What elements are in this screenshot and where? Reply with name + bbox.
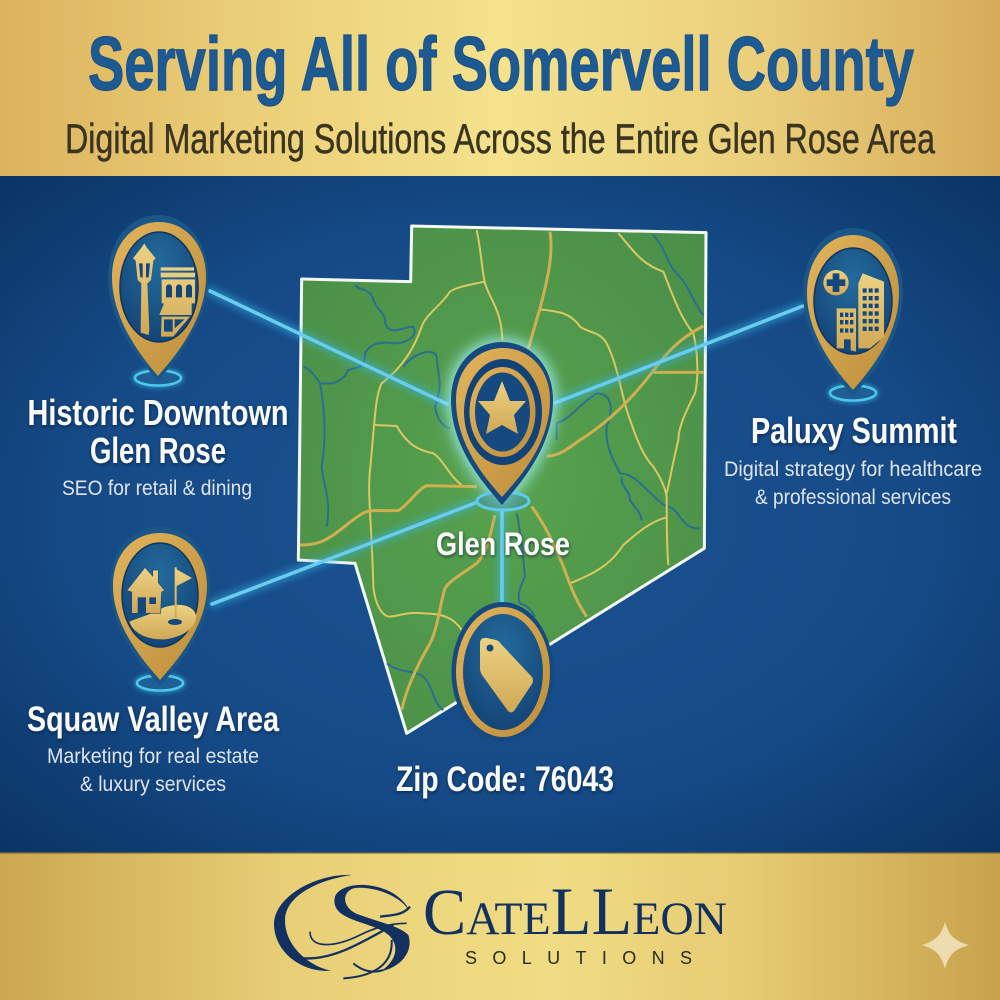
label: Historic Downtown bbox=[28, 392, 288, 500]
label: Paluxy Summit: & professional services bbox=[755, 486, 951, 509]
label: Historic Downtown: SEO for retail & dining bbox=[62, 477, 252, 500]
rivers bbox=[303, 235, 703, 710]
label: Paluxy Summit bbox=[724, 410, 982, 509]
label: Squaw Valley: Marketing for real estate bbox=[47, 745, 259, 768]
major roads bbox=[300, 232, 703, 710]
pin: Paluxy Summit bbox=[803, 228, 903, 400]
logo tagline: SOLUTIONS bbox=[465, 948, 692, 968]
logo mark bbox=[274, 875, 410, 978]
icon: house and golf flag bbox=[127, 567, 196, 639]
icon: price tag bbox=[480, 638, 533, 712]
label: Historic Downtown: Historic Downtown bbox=[28, 392, 288, 433]
label: Squaw Valley: & luxury services bbox=[80, 773, 226, 796]
header band bbox=[0, 0, 1000, 176]
connector lines bbox=[210, 291, 803, 605]
label: Historic Downtown: Glen Rose bbox=[90, 430, 226, 471]
footer band bbox=[0, 852, 1000, 1000]
logo wordmark: CATELLEON bbox=[423, 873, 727, 949]
icon: medical cross and buildings bbox=[823, 270, 884, 352]
minor roads bbox=[369, 230, 697, 630]
pin: Glen Rose center bbox=[451, 342, 553, 510]
label: Glen Rose: Glen Rose bbox=[436, 526, 570, 562]
pin: Zip code tag bbox=[452, 602, 554, 742]
background panel bbox=[0, 176, 1000, 853]
label: Squaw Valley bbox=[27, 700, 279, 796]
icon: lamp and storefront bbox=[133, 243, 195, 337]
county map bbox=[298, 226, 706, 733]
label: Squaw Valley: Squaw Valley Area bbox=[27, 700, 279, 739]
label: Zip Code: Zip Code: 76043 bbox=[396, 760, 614, 799]
label: Paluxy Summit: Digital strategy for healthcare bbox=[724, 458, 982, 481]
icon: star bbox=[478, 381, 526, 434]
pin: Squaw Valley bbox=[110, 527, 210, 690]
icon: sparkle bbox=[922, 922, 969, 969]
pin: Historic Downtown bbox=[108, 215, 208, 386]
